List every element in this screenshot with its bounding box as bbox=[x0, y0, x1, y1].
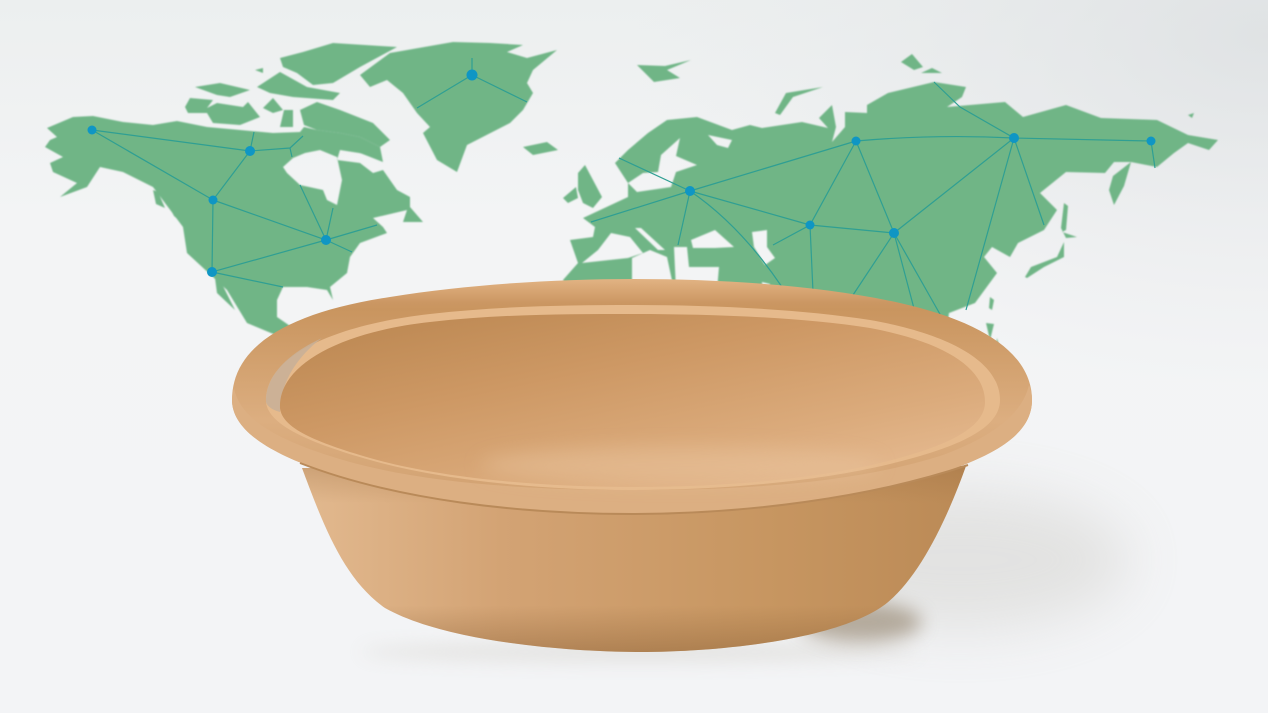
fibre bowl bbox=[232, 279, 1032, 652]
map: Baja and coastal fragments bbox=[153, 190, 345, 315]
map: North America bbox=[45, 116, 423, 338]
map: Greenland bbox=[360, 42, 557, 172]
inner ledge highlight bbox=[266, 305, 1000, 490]
bowl rim bbox=[232, 279, 1032, 514]
inner floor highlight bbox=[480, 447, 880, 483]
map: Kamchatka bbox=[1109, 162, 1131, 205]
map: Novaya Zemlya and northern islands bbox=[775, 54, 1194, 118]
map: Japan and Sakhalin bbox=[1025, 203, 1077, 278]
map: Iceland bbox=[523, 142, 558, 155]
map: Arctic Archipelago bbox=[185, 43, 397, 162]
bowl shadow bbox=[360, 490, 1130, 662]
network lines bbox=[92, 58, 1155, 323]
map: Southeast Asia fragments bbox=[986, 297, 1001, 353]
bowl outer wall bbox=[302, 466, 966, 652]
bowl inner wall bbox=[280, 314, 985, 487]
map: British Isles bbox=[563, 165, 602, 208]
rim underside edge bbox=[300, 463, 968, 514]
world map bbox=[45, 42, 1218, 353]
network nodes bbox=[88, 70, 1156, 277]
shaded ledge on left side bbox=[266, 338, 322, 412]
map: Svalbard bbox=[637, 60, 691, 82]
map: Eurasia bbox=[563, 82, 1218, 345]
rim left and right outer roll bbox=[232, 385, 1032, 514]
